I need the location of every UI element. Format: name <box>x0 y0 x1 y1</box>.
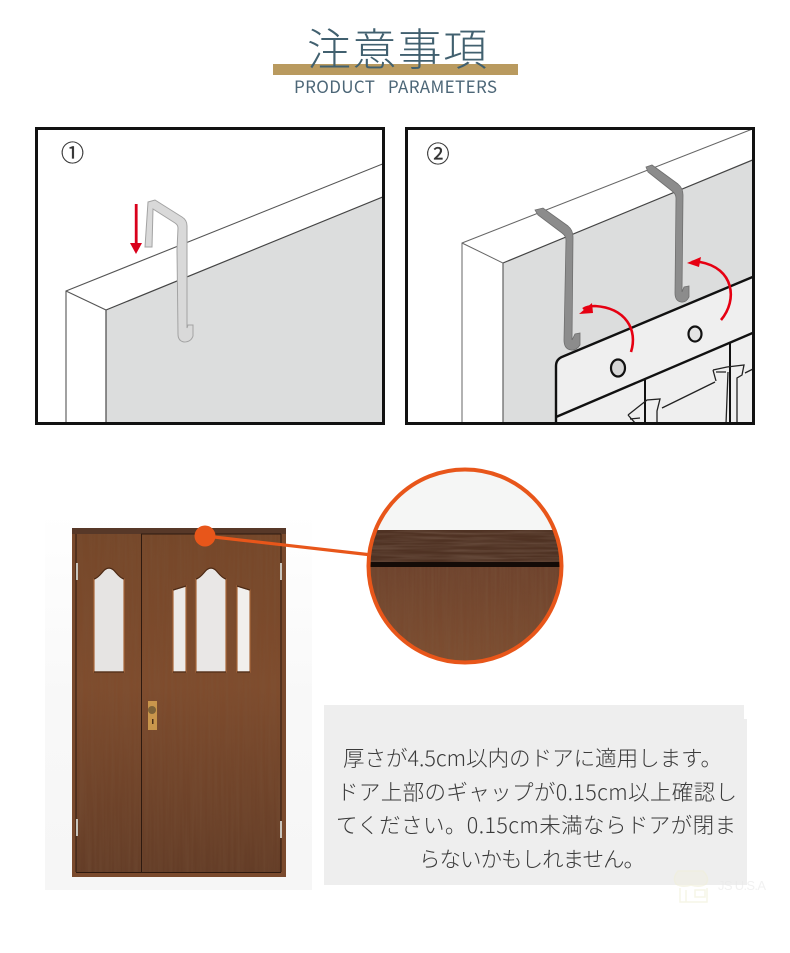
narrow window left <box>173 586 186 672</box>
arrow: down <box>130 204 142 254</box>
grommet right <box>688 326 702 342</box>
organizer header <box>556 276 755 424</box>
hinges <box>77 563 281 838</box>
door frame <box>72 528 286 877</box>
door seam <box>76 534 281 872</box>
subtitle: PRODUCT PARAMETERS <box>294 73 497 98</box>
panel 2 background <box>406 128 754 424</box>
lens ring <box>368 470 562 662</box>
door photo <box>45 512 312 890</box>
icon: right hook <box>646 165 689 302</box>
panel 1 border <box>36 128 384 424</box>
center window <box>196 568 226 672</box>
door frame lines <box>66 163 385 424</box>
pockets <box>645 343 730 424</box>
magnified detail circle <box>360 469 570 667</box>
left window <box>94 568 124 672</box>
narrow window right <box>237 586 250 672</box>
note text: らないかもしれません。 <box>419 843 645 874</box>
close-up: door wood <box>370 567 560 660</box>
door leaves <box>76 534 281 872</box>
arrow: right curved <box>687 257 731 320</box>
panel 1 background <box>36 128 384 424</box>
close-up: gap <box>370 562 560 567</box>
panel: step 1 <box>36 128 385 424</box>
title: 注意事項 <box>307 14 487 78</box>
note text: 厚さが4.5cm以内のドアに適用します。 <box>343 742 722 773</box>
note text: ドア上部のギャップが0.15cm以上確認し <box>337 776 737 807</box>
note text: てください。0.15cm未満ならドアが閉ま <box>336 809 736 840</box>
heading bar <box>273 64 518 75</box>
panel: step 2 <box>406 128 755 424</box>
grommet left <box>611 360 625 376</box>
door face <box>106 196 385 424</box>
window shadows <box>94 568 250 672</box>
arrow: left curved <box>579 303 633 352</box>
door face <box>503 159 755 424</box>
step number 1: ① <box>61 134 84 168</box>
icon: left hook <box>535 208 580 350</box>
step number 2: ② <box>426 135 450 169</box>
page heading <box>273 14 518 98</box>
close-up: door frame <box>370 530 560 562</box>
note text <box>336 742 737 874</box>
door handle <box>148 701 157 730</box>
callout pointer <box>194 526 372 555</box>
watermark text: JS U.S.A <box>718 878 766 893</box>
icon: store <box>674 871 707 902</box>
note background <box>324 705 747 885</box>
door frame lines <box>462 128 755 424</box>
note panel <box>324 705 747 885</box>
icon: hook <box>145 200 193 342</box>
panel 2 border <box>406 128 754 424</box>
photo backdrop <box>45 512 312 890</box>
watermark <box>674 871 766 902</box>
